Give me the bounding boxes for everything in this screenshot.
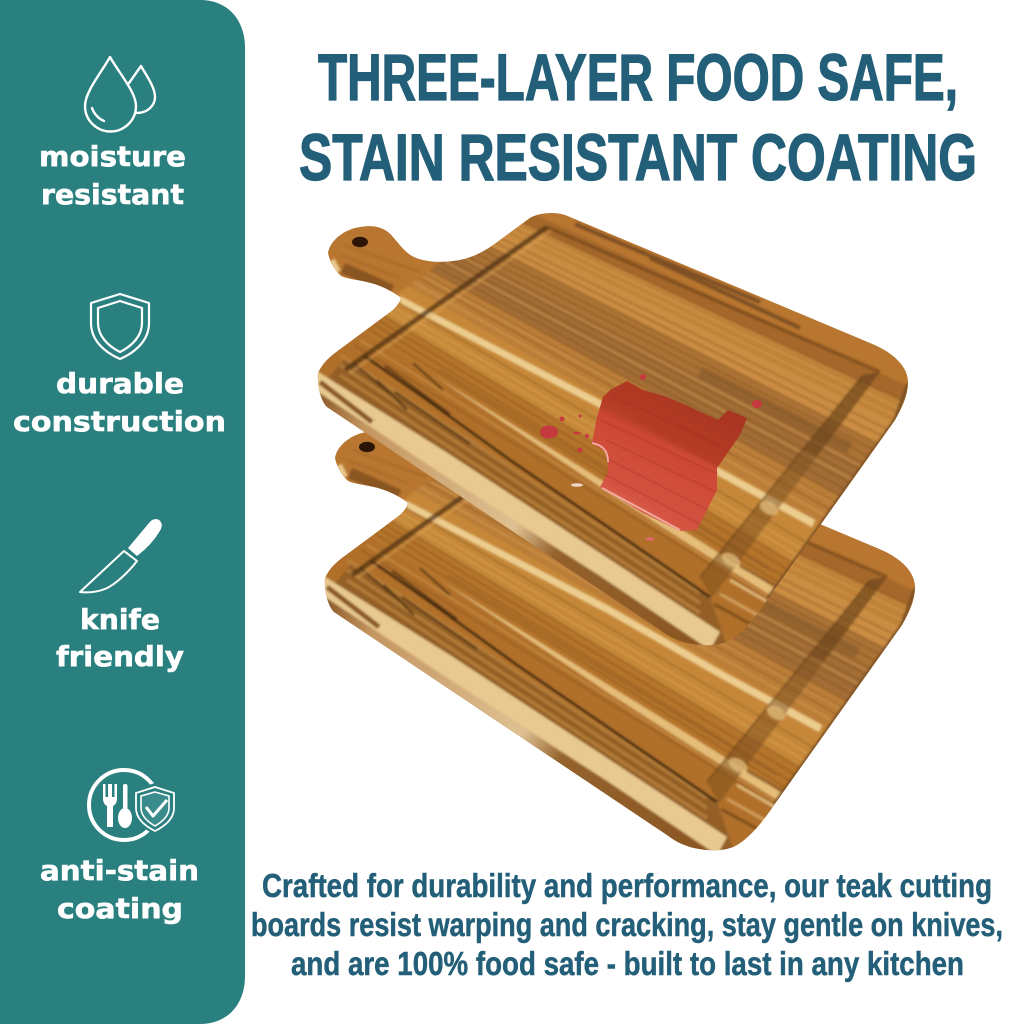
label: moisture resistant: moisture [39,140,186,173]
label: durable construction [13,367,226,438]
stain streaks [600,396,722,524]
spilled droplets [540,374,762,541]
label: knife friendly [56,603,184,673]
label: durable construction: durable [56,367,184,400]
label: anti-stain coating [40,854,199,925]
icon: water drops [85,57,155,132]
icon: plate with cutlery and shield [89,770,176,840]
feature: durable construction [13,294,226,438]
stain puddle [592,381,747,531]
stain highlight [592,443,680,530]
label: durable construction: construction [13,405,226,438]
image: upper teak cutting board [300,200,930,670]
label: knife friendly: knife [80,603,160,636]
label: moisture resistant: resistant [41,178,184,211]
feature: anti-stain coating [40,770,199,925]
panel: features sidebar [0,0,245,1024]
feature: knife friendly [56,520,184,673]
label: moisture resistant [39,140,186,211]
title [299,40,977,194]
feature: moisture resistant [39,57,186,211]
image: lower teak cutting board [307,405,937,875]
icon: knife [80,520,161,592]
label: knife friendly: friendly [56,640,184,673]
label: anti-stain coating: anti-stain [40,854,199,887]
red liquid beading on coating [540,374,762,541]
icon: shield [91,294,149,359]
label: anti-stain coating: coating [57,892,183,925]
body text [251,867,1003,982]
